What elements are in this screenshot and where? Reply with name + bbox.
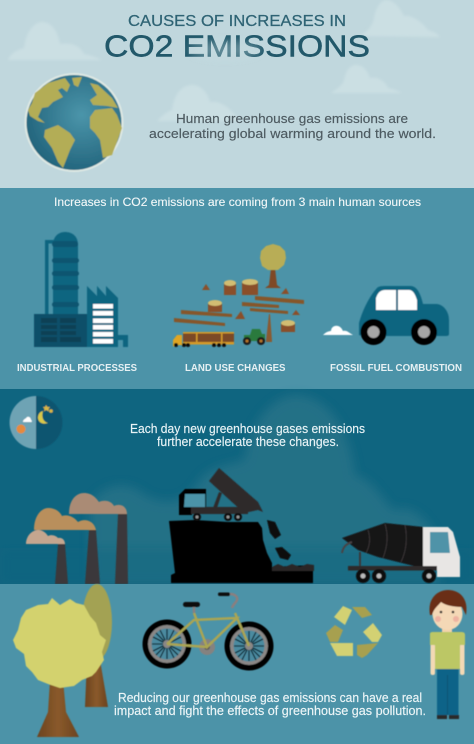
- standing trunk: [266, 314, 272, 342]
- icon: coal dump truck: [169, 468, 314, 583]
- icon: factory: [34, 232, 128, 347]
- intro text: accelerating global warming around the world.: [149, 126, 436, 141]
- panel: sky header: [0, 0, 474, 189]
- icon: car: [323, 286, 449, 345]
- europe: [90, 83, 118, 108]
- background haze clouds: [90, 395, 440, 584]
- icon: recycle symbol: [326, 606, 382, 658]
- panel: solutions: [0, 584, 474, 744]
- icon: land use: [173, 244, 304, 347]
- tree: [260, 244, 286, 288]
- coal pile: [169, 520, 313, 583]
- icon: day and night: [10, 396, 62, 449]
- exhaust cloud: [323, 326, 353, 335]
- source labels: [17, 362, 462, 374]
- truck: [209, 468, 263, 513]
- south america: [44, 125, 75, 168]
- icon: front tree: [13, 598, 106, 737]
- icon: smokestacks: [26, 493, 128, 584]
- panel: human sources: [0, 188, 474, 389]
- tractor: [243, 329, 265, 345]
- closing text: Reducing our greenhouse gas emissions can have a real: [118, 690, 422, 705]
- stumps: [202, 279, 300, 332]
- logs: [174, 296, 304, 326]
- source labels: INDUSTRIAL PROCESSES: [17, 362, 137, 374]
- smoke: [26, 530, 65, 544]
- title line 2: CO2 EMISSIONS: [104, 28, 370, 64]
- daily text: [130, 421, 365, 449]
- greenland: [72, 77, 82, 87]
- logging truck: [173, 332, 234, 347]
- intro text: [149, 111, 436, 141]
- icon: globe: [24, 73, 124, 172]
- closing text: impact and fight the effects of greenhouse gas pollution.: [114, 703, 426, 718]
- africa: [90, 108, 122, 158]
- north america: [28, 78, 70, 123]
- source labels: FOSSIL FUEL COMBUSTION: [330, 362, 462, 374]
- sources heading: Increases in CO2 emissions are coming from 3 main human sources: [54, 195, 421, 209]
- daily text: Each day new greenhouse gases emissions: [130, 421, 365, 436]
- background clouds: [8, 0, 440, 121]
- intro text: Human greenhouse gas emissions are: [176, 111, 408, 126]
- closing text: [114, 690, 426, 718]
- title line 1: CAUSES OF INCREASES IN: [128, 13, 346, 30]
- falling coal: [267, 520, 281, 539]
- daily text: further accelerate these changes.: [157, 434, 339, 449]
- icon: back tree: [82, 584, 112, 707]
- icon: bicycle: [142, 592, 274, 670]
- panel: daily emissions: [0, 389, 474, 584]
- icon: person: [429, 590, 467, 719]
- title: [104, 13, 370, 64]
- icon: cement mixer truck: [342, 523, 460, 583]
- source labels: LAND USE CHANGES: [185, 362, 286, 374]
